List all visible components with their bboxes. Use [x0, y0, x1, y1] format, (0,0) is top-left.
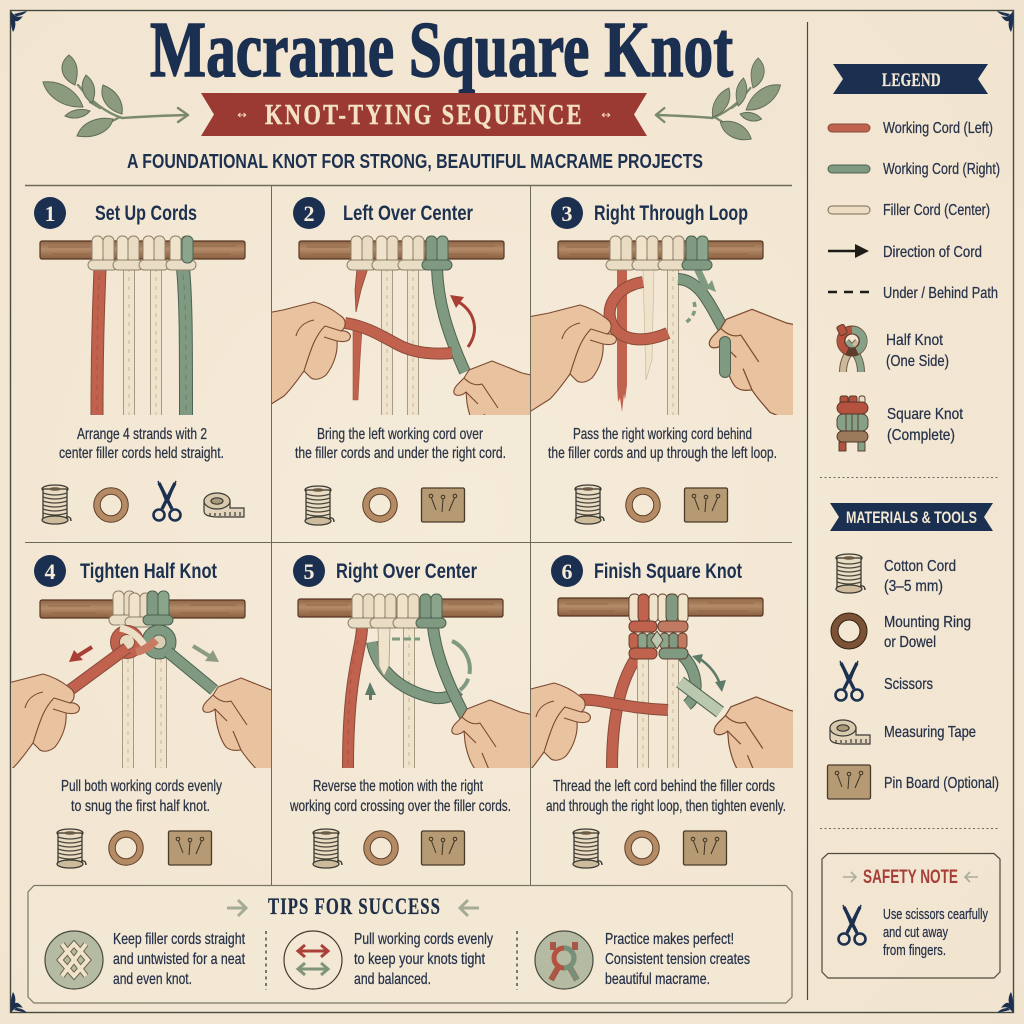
- legend: square knot: (Complete): [887, 427, 955, 444]
- step 1 number: [34, 197, 66, 229]
- tip 1 text: [113, 931, 245, 988]
- material: mounting ring: [834, 614, 971, 651]
- material: pin board: [828, 765, 999, 799]
- panel: step 5: [290, 555, 530, 869]
- legend: direction arrow: Direction of Cord: [883, 244, 982, 261]
- legend: dashed path: Under / Behind Path: [883, 285, 998, 302]
- panel: step 4: [11, 555, 271, 869]
- step 3 caption: the filler cords and up through the left loop.: [548, 445, 777, 462]
- step 3 heading: Right Through Loop: [594, 202, 748, 225]
- step 5 caption: Reverse the motion with the right: [313, 778, 483, 795]
- panel: safety note: [822, 854, 1000, 978]
- step 6 illustration: [531, 594, 793, 768]
- step 2 number: [293, 197, 325, 229]
- legend: filler cord: Filler Cord (Center): [883, 202, 990, 219]
- legend: direction arrow: [828, 244, 982, 261]
- panel: step 2: [272, 197, 530, 526]
- step 2 heading: Left Over Center: [343, 202, 473, 225]
- step 2 caption: [295, 426, 506, 462]
- step 2 caption: Bring the left working cord over: [317, 426, 484, 443]
- panel grid lines: [25, 22, 808, 1000]
- tip 2 text: [354, 931, 493, 988]
- step 1 illustration: [40, 236, 245, 415]
- step 5 number: [293, 555, 325, 587]
- legend: square knot: [837, 396, 963, 451]
- tip 2 text: Pull working cords evenly: [354, 931, 493, 948]
- material: cotton cord: [836, 554, 956, 595]
- material: scissors: Scissors: [884, 676, 933, 693]
- panel: step 3: [531, 197, 793, 525]
- tip 3 icon: [535, 931, 593, 989]
- material: scissors: [836, 661, 933, 700]
- panel: tips for success: [28, 886, 792, 1003]
- step 5 heading: Right Over Center: [336, 560, 477, 583]
- step 6 caption: [546, 778, 786, 815]
- step 1 heading: Set Up Cords: [95, 202, 197, 225]
- legend: filler cord: [828, 202, 990, 219]
- step 3 illustration: [531, 236, 793, 415]
- step 3 number: 3: [562, 201, 572, 226]
- icon: left laurel branch with arrow: [43, 55, 188, 137]
- step 2 caption: the filler cords and under the right cord.: [295, 445, 506, 462]
- step 2 tools: [305, 486, 464, 525]
- step 6 tools: [573, 829, 726, 868]
- step 3 number: [551, 197, 583, 229]
- legend: working cord right: [828, 161, 1000, 178]
- step 1 caption: Arrange 4 strands with 2: [77, 426, 207, 443]
- banner: knot-tying sequence: [201, 93, 647, 136]
- icon: scissors: [838, 905, 866, 944]
- step 5 caption: working cord crossing over the filler cords.: [289, 798, 511, 815]
- material: cotton cord: Cotton Cord: [884, 558, 956, 575]
- tip 2 text: and balanced.: [354, 971, 431, 988]
- legend: working cord left: [828, 120, 993, 137]
- panel: legend: [828, 64, 1000, 451]
- legend: square knot: Square Knot: [887, 406, 963, 423]
- banner: knot-tying sequence: KNOT-TYING SEQUENCE: [265, 100, 584, 131]
- safety text: from fingers.: [883, 942, 946, 959]
- step 4 caption: [61, 778, 222, 815]
- material: mounting ring: Mounting Ring: [884, 614, 971, 631]
- legend: half knot: (One Side): [886, 353, 949, 370]
- material: mounting ring: or Dowel: [884, 634, 936, 651]
- tip 1 icon: [45, 931, 103, 989]
- tip 1 text: Keep filler cords straight: [113, 931, 245, 948]
- step 4 tools: [57, 829, 212, 868]
- step 3 caption: [548, 426, 777, 462]
- step 1 caption: [59, 426, 224, 462]
- step 1 number: 1: [44, 201, 56, 226]
- step 2 number: 2: [304, 201, 314, 226]
- material: measuring tape: Measuring Tape: [884, 724, 976, 741]
- step 5 number: 5: [304, 559, 314, 584]
- tip 3 text: beautiful macrame.: [605, 971, 710, 988]
- legend: working cord left: Working Cord (Left): [883, 120, 993, 137]
- legend banner: LEGEND: [882, 70, 941, 91]
- panel: step 6: [531, 555, 793, 869]
- step 6 caption: Thread the left cord behind the filler cords: [553, 778, 775, 795]
- step 3 tools: [575, 485, 728, 524]
- step 4 caption: to snug the first half knot.: [71, 798, 210, 815]
- tips heading: TIPS FOR SUCCESS: [268, 894, 441, 919]
- safety text: Use scissors cearfully: [883, 906, 988, 923]
- tip 3 text: Consistent tension creates: [605, 951, 750, 968]
- material: measuring tape: [830, 720, 976, 744]
- legend: half knot: Half Knot: [886, 332, 943, 349]
- panel: step 1: [34, 197, 245, 524]
- step 4 number: [34, 555, 66, 587]
- step 1 tools: [42, 481, 244, 524]
- tip 2 icon: [284, 931, 342, 989]
- materials banner: MATERIALS & TOOLS: [846, 508, 977, 527]
- tip 1 text: and even knot.: [113, 971, 192, 988]
- safety text: [883, 906, 988, 959]
- step 4 heading: Tighten Half Knot: [80, 560, 217, 583]
- icon: right laurel branch with arrow: [656, 58, 781, 140]
- step 3 caption: Pass the right working cord behind: [573, 426, 752, 443]
- tips heading arrows: [227, 900, 479, 916]
- tip 3 text: Practice makes perfect!: [605, 931, 734, 948]
- safety arrows: [843, 872, 978, 882]
- step 4 number: 4: [44, 559, 56, 584]
- tip 3 text: [605, 931, 750, 988]
- safety heading: SAFETY NOTE: [863, 867, 958, 888]
- step 4 caption: Pull both working cords evenly: [61, 778, 222, 795]
- legend: half knot: [836, 324, 949, 372]
- step 6 caption: and through the right loop, then tighten evenly.: [546, 798, 786, 815]
- step 6 heading: Finish Square Knot: [594, 560, 742, 583]
- title: Macrame Square Knot: [150, 7, 733, 94]
- tip 2 text: to keep your knots tight: [354, 951, 485, 968]
- step 2 illustration: [272, 236, 530, 415]
- step 6 number: 6: [562, 559, 572, 584]
- step 5 tools: [313, 829, 464, 868]
- panel: materials and tools: [828, 503, 999, 799]
- safety text: and cut away: [883, 924, 948, 941]
- legend banner: [833, 64, 988, 94]
- materials banner: [830, 503, 993, 531]
- step 5 illustration: [297, 594, 530, 768]
- step 5 caption: [289, 778, 511, 815]
- tip 1 text: and untwisted for a neat: [113, 951, 245, 968]
- step 4 illustration: [11, 590, 271, 768]
- material: cotton cord: (3–5 mm): [884, 578, 943, 595]
- subtitle: A FOUNDATIONAL KNOT FOR STRONG, BEAUTIFUL MACRAME PROJECTS: [127, 151, 703, 173]
- step 1 caption: center filler cords held straight.: [59, 445, 224, 462]
- step 6 number: [551, 555, 583, 587]
